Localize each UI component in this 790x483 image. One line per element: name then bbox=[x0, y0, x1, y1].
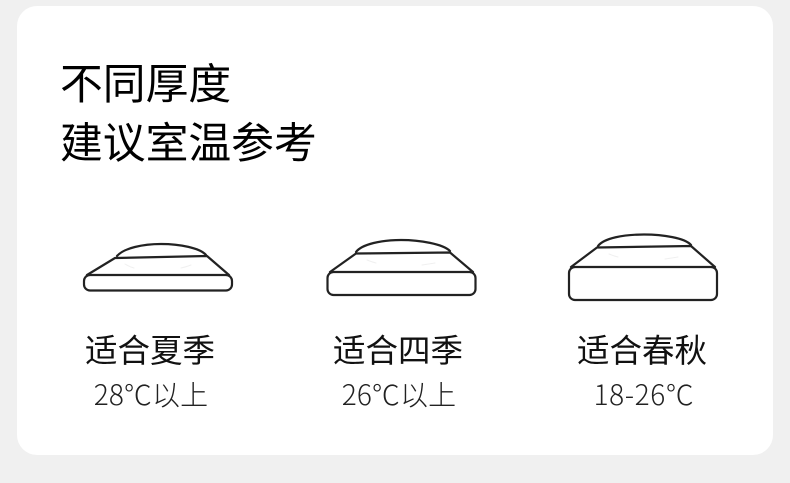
title line 1: 不同厚度 bbox=[60, 50, 231, 112]
icon: medium mattress bbox=[328, 240, 476, 295]
label: spring and autumn: 适合春秋 bbox=[577, 325, 707, 372]
temperature: all seasons: 26℃以上 bbox=[342, 374, 456, 414]
temperature: summer: 28℃以上 bbox=[94, 374, 208, 414]
temperature: spring and autumn: 18-26℃ bbox=[594, 374, 694, 414]
icon: thick mattress bbox=[569, 234, 717, 300]
label: summer: 适合夏季 bbox=[85, 325, 215, 372]
title line 2: 建议室温参考 bbox=[60, 109, 317, 171]
label: all seasons: 适合四季 bbox=[333, 325, 463, 372]
icon: thin mattress bbox=[84, 244, 232, 290]
